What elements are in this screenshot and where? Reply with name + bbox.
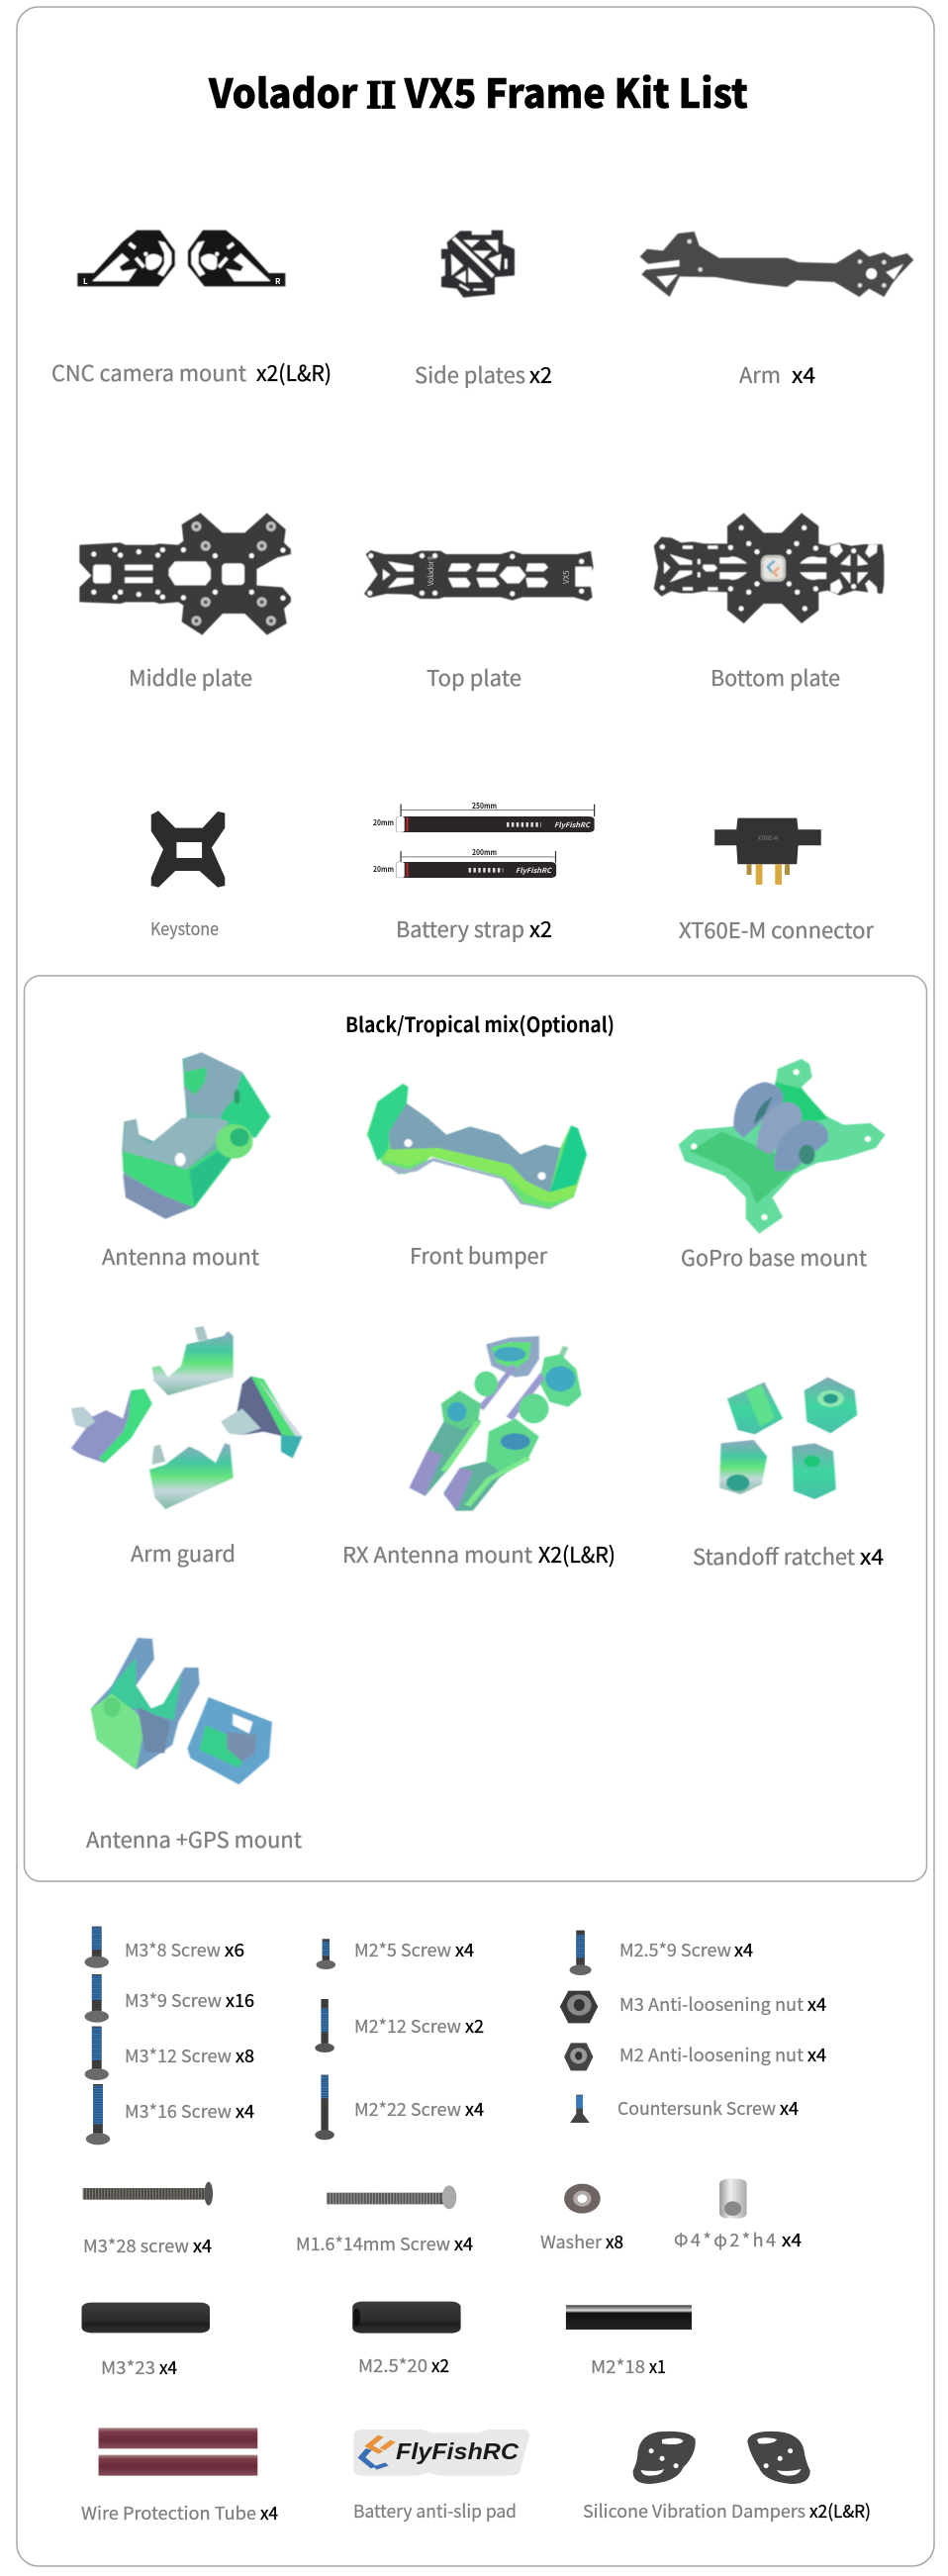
label: M2*22 screw: x4 <box>465 2096 484 2122</box>
label: M2*18 <box>591 2353 666 2379</box>
label: antenna + GPS mount: Antenna +GPS mount <box>86 1823 302 1855</box>
label: RX antenna mount <box>342 1538 616 1570</box>
icon: battery straps: 200mm <box>472 847 497 858</box>
icon: battery straps: 250mm <box>472 801 497 811</box>
label: countersunk screw: Countersunk Screw <box>617 2095 776 2121</box>
label: CNC camera mount: CNC camera mount <box>51 356 246 388</box>
icon: CNC camera mounts <box>77 231 285 287</box>
label: M3*8 screw: x6 <box>225 1937 244 1962</box>
icon: countersunk screw <box>570 2095 590 2123</box>
label: silicone vibration dampers: x2(L&R) <box>809 2498 871 2524</box>
panel: screws and hardware <box>81 1927 871 2526</box>
label: M3 anti-loosening nut: M3 Anti-loosening nut <box>619 1991 804 2017</box>
icon: standoff ratchets <box>719 1378 857 1499</box>
icon: M3*28 screw <box>83 2182 213 2206</box>
label: M2*5 screw: x4 <box>455 1937 474 1962</box>
icon: aluminium spacer <box>719 2179 747 2219</box>
label: front bumper: Front bumper <box>410 1239 547 1271</box>
icon: CNC camera mounts: L <box>83 276 88 287</box>
label: washer: x8 <box>606 2229 623 2254</box>
label: M2*5 screw: M2*5 Screw <box>354 1937 451 1962</box>
icon: top plate: VX5 <box>561 570 572 584</box>
label: M2 anti-loosening nut: x4 <box>807 2042 826 2067</box>
icon: arm <box>640 232 913 297</box>
heading: Black/Tropical mix: Black/Tropical mix(Optional) <box>345 1009 615 1039</box>
label: M2.5*20: M2.5*20 <box>358 2352 427 2378</box>
icon: M2*18 standoff <box>566 2305 692 2330</box>
label: battery strap: Battery strap <box>396 912 524 944</box>
label: M3*9 screw: x16 <box>226 1987 254 2013</box>
label: M2*12 screw: M2*12 Screw <box>354 2013 461 2039</box>
icon: M3*9 screw <box>85 1974 109 2023</box>
icon: M3*12 screw <box>85 2027 109 2080</box>
icon: keystone <box>151 811 225 888</box>
label: arm: Arm <box>739 358 781 390</box>
icon: RX antenna mounts <box>410 1336 582 1511</box>
label: M3*16 screw: x4 <box>236 2098 254 2124</box>
label: arm guard: Arm guard <box>131 1537 236 1569</box>
icon: CNC camera mounts: R <box>275 276 281 287</box>
label: M1.6*14mm screw: x4 <box>454 2231 473 2256</box>
label: M3*23: x4 <box>159 2354 177 2380</box>
icon: M2*5 screw <box>317 1939 335 1969</box>
label: standoff ratchet: Standoff ratchet <box>693 1540 855 1572</box>
icon: M3 anti-loosening nut <box>560 1991 598 2023</box>
label: M1.6*14mm screw: M1.6*14mm Screw <box>296 2231 450 2256</box>
label: M2*12 screw: x2 <box>465 2013 484 2039</box>
label: wire protection tube: x4 <box>260 2500 278 2526</box>
label: arm: x4 <box>792 358 815 390</box>
icon: wire protection tubes <box>99 2428 257 2476</box>
label: RX antenna mount: RX Antenna mount <box>342 1538 532 1570</box>
icon: battery straps <box>373 801 595 878</box>
icon: M3*23 standoff <box>81 2303 210 2333</box>
label: M3*9 screw: M3*9 Screw <box>125 1987 222 2013</box>
label: M3*28 screw: x4 <box>193 2233 212 2258</box>
label: M3*23: M3*23 <box>101 2354 155 2380</box>
label: antenna mount: Antenna mount <box>102 1240 259 1272</box>
label: M2.5*9 screw: x4 <box>734 1937 753 1962</box>
icon: M3*16 screw <box>86 2084 110 2145</box>
icon: silicone vibration dampers <box>633 2432 810 2484</box>
icon: GoPro base mount <box>679 1059 886 1234</box>
icon: M2.5*9 screw <box>570 1931 592 1975</box>
icon: washer <box>564 2184 601 2214</box>
icon: bottom plate <box>654 513 884 623</box>
panel frame <box>24 976 926 1881</box>
icon: XT60E-M connector <box>714 818 821 885</box>
label: M3*8 screw: M3*8 Screw <box>125 1937 221 1962</box>
label: XT60E-M connector: XT60E-M connector <box>679 913 874 945</box>
label: arm <box>739 358 815 390</box>
icon: side plates <box>441 231 515 298</box>
icon: battery straps: 20mm <box>373 864 394 875</box>
icon: front bumper <box>367 1084 587 1209</box>
label: standoff ratchet: x4 <box>860 1540 884 1572</box>
label: keystone: Keystone <box>150 915 219 941</box>
icon: top plate <box>364 550 594 601</box>
label: middle plate: Middle plate <box>129 661 252 693</box>
panel: carbon frame parts <box>51 231 913 945</box>
icon: M1.6*14mm screw <box>327 2185 456 2209</box>
icon: M3*8 screw <box>85 1927 109 1968</box>
icon: arm guards <box>71 1326 302 1509</box>
label: battery strap: x2 <box>529 912 552 944</box>
label: M3*12 screw: M3*12 Screw <box>125 2043 232 2068</box>
label: M2*18: M2*18 <box>591 2353 645 2379</box>
label: countersunk screw: x4 <box>780 2095 799 2121</box>
label: M3*28 screw: M3*28 screw <box>83 2233 189 2258</box>
label: M2*22 screw: M2*22 Screw <box>354 2096 461 2122</box>
icon: middle plate <box>79 513 291 635</box>
icon: battery anti-slip pad with FlyFishRC logo: FlyFishRC <box>396 2438 519 2464</box>
label: washer: Washer <box>540 2229 603 2254</box>
label: CNC camera mount: x2(L&R) <box>256 356 332 388</box>
icon: M2*12 screw <box>315 1999 334 2052</box>
label: M3 anti-loosening nut: x4 <box>807 1991 826 2017</box>
icon: antenna mount <box>122 1052 270 1219</box>
icon: M2*22 screw <box>315 2075 334 2140</box>
icon: M2 anti-loosening nut <box>564 2043 593 2070</box>
label: spacer dimensions: Φ4*φ2*h4 <box>674 2227 776 2252</box>
label: M2 anti-loosening nut: M2 Anti-loosening nut <box>619 2042 804 2067</box>
label: side plates: Side plates <box>415 358 525 390</box>
label: wire protection tube: Wire Protection Tube <box>81 2500 256 2526</box>
label: M2.5*9 screw: M2.5*9 Screw <box>619 1937 731 1962</box>
label: spacer dimensions: x4 <box>782 2227 802 2252</box>
icon: M2.5*20 standoff <box>352 2302 461 2334</box>
icon: battery straps: 20mm <box>373 817 394 828</box>
label: battery anti-slip pad: Battery anti-slip pad <box>353 2498 517 2524</box>
icon: antenna and GPS mount <box>91 1638 272 1784</box>
panel: Black/Tropical mix optional parts <box>24 976 926 1881</box>
icon: top plate: Volador II <box>426 556 436 586</box>
icon: battery straps: FlyFishRC <box>554 820 591 830</box>
icon: battery anti-slip pad with FlyFishRC logo <box>353 2430 529 2476</box>
label: silicone vibration dampers: Silicone Vibration Dampers <box>583 2498 806 2524</box>
label: M3*23 <box>101 2354 177 2380</box>
label: GoPro base mount: GoPro base mount <box>681 1241 867 1273</box>
title: Volador II VX5 Frame Kit List <box>208 62 748 120</box>
label: top plate: Top plate <box>427 661 521 693</box>
label: bottom plate: Bottom plate <box>711 661 840 693</box>
label: M2.5*20: x2 <box>431 2352 449 2378</box>
icon: XT60E-M connector: XT60E-M <box>758 833 778 842</box>
icon: battery straps: FlyFishRC <box>516 866 552 876</box>
label: RX antenna mount: X2(L&R) <box>538 1538 616 1570</box>
label: side plates: x2 <box>529 358 552 390</box>
label: M3*16 screw: M3*16 Screw <box>125 2098 232 2124</box>
label: M3*12 screw: x8 <box>236 2043 254 2068</box>
label: M2*18: x1 <box>649 2353 666 2379</box>
